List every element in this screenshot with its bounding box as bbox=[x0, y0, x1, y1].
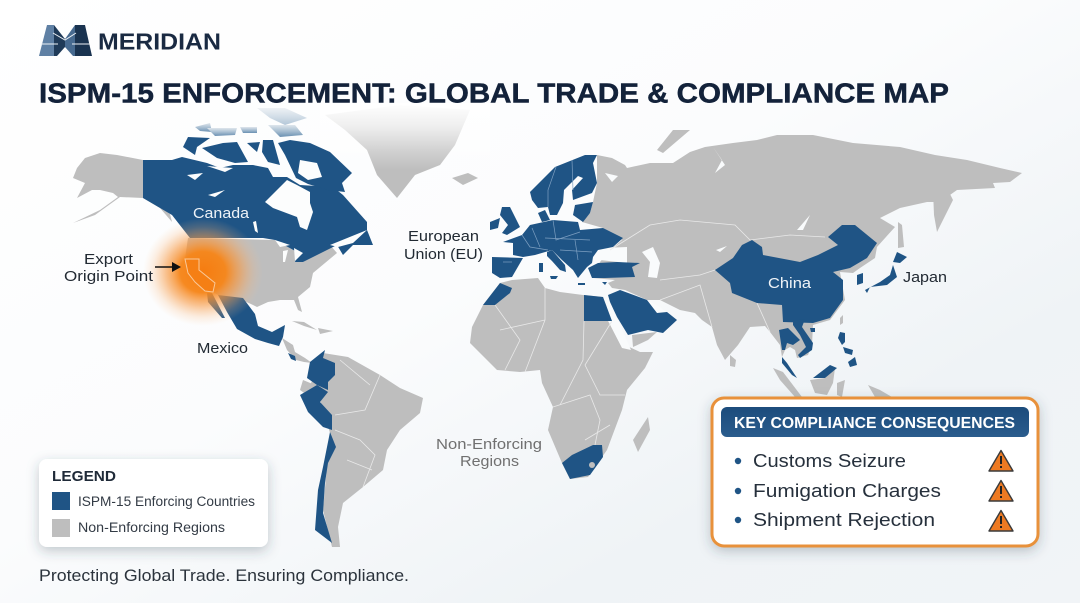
arrow: export origin bbox=[155, 262, 181, 272]
label: European Union: European bbox=[408, 229, 479, 245]
panel: legend bbox=[39, 459, 268, 547]
Canadian Arctic faded islands bbox=[195, 108, 307, 137]
logo bbox=[39, 25, 221, 56]
label: Non-Enforcing Regions bbox=[436, 437, 542, 470]
legend item: non-enforcing bbox=[52, 519, 225, 537]
Greenland top fade bbox=[320, 103, 490, 170]
map labels bbox=[64, 206, 947, 470]
icon: warning 2 bbox=[989, 480, 1013, 501]
label: Export Origin Point: Export bbox=[84, 252, 133, 268]
borders on non-enforcing regions bbox=[335, 220, 825, 487]
label: China: China bbox=[768, 276, 812, 292]
label: European Union bbox=[404, 229, 483, 263]
South Africa bbox=[562, 445, 603, 479]
item: shipment rejection: Shipment Rejection bbox=[753, 510, 935, 530]
Canada bbox=[143, 137, 373, 262]
legend item: non-enforcing: Non-Enforcing Regions bbox=[78, 520, 225, 535]
panel: key compliance consequences bbox=[712, 398, 1038, 546]
East Asia enforcing countries bbox=[779, 252, 907, 378]
Export origin glow bbox=[143, 218, 263, 326]
label: Canada: Canada bbox=[193, 206, 250, 222]
item: customs seizure: Customs Seizure bbox=[753, 451, 906, 471]
Mexico bbox=[207, 293, 285, 346]
panel header: KEY COMPLIANCE CONSEQUENCES bbox=[734, 415, 1015, 432]
California highlight bbox=[185, 259, 215, 292]
Europe and Middle East enforcing countries bbox=[483, 155, 677, 335]
panel header bbox=[721, 407, 1029, 437]
Canadian waters bbox=[187, 160, 367, 262]
legend item: enforcing: ISPM-15 Enforcing Countries bbox=[78, 494, 255, 509]
icon: warning 3 bbox=[989, 510, 1013, 531]
tagline: Protecting Global Trade. Ensuring Compliance. bbox=[39, 567, 409, 585]
label: Export Origin Point bbox=[64, 252, 153, 285]
world map bbox=[73, 103, 1022, 547]
label: Mexico: Mexico bbox=[197, 341, 248, 357]
non-enforcing land masses bbox=[73, 105, 1022, 547]
icon: warning 1 bbox=[989, 450, 1013, 471]
label: European Union: Union (EU) bbox=[404, 247, 483, 263]
title: ISPM-15 ENFORCEMENT: GLOBAL TRADE & COMPLIANCE MAP bbox=[39, 78, 949, 108]
seas and lakes bbox=[593, 147, 810, 350]
label: Export Origin Point: Origin Point bbox=[64, 269, 153, 285]
South America enforcing countries bbox=[288, 350, 336, 543]
logo mark bbox=[39, 25, 92, 56]
label: Non-Enforcing Regions: Regions bbox=[460, 454, 519, 470]
China bbox=[715, 225, 877, 323]
item: fumigation charges: Fumigation Charges bbox=[753, 481, 941, 501]
label: Non-Enforcing Regions: Non-Enforcing bbox=[436, 437, 542, 453]
logo wordmark: MERIDIAN bbox=[98, 28, 221, 54]
European borders bbox=[503, 160, 592, 262]
label: Japan: Japan bbox=[903, 270, 947, 286]
legend heading: LEGEND bbox=[52, 468, 116, 485]
